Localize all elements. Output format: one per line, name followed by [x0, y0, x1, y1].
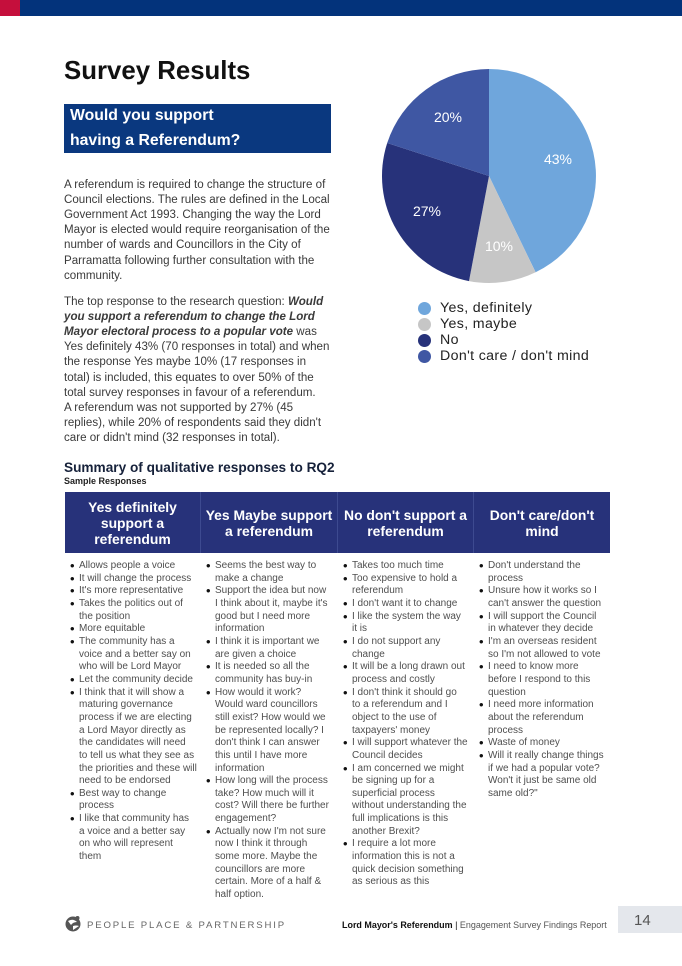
column: yes maybe responses: make a change: [215, 573, 283, 584]
findings paragraph: replies), while 20% of respondents said they didn't: [64, 417, 321, 429]
column: yes definitely responses: •: [70, 558, 75, 573]
red corner block: [0, 0, 20, 16]
column: yes maybe responses: engagement?: [215, 813, 276, 824]
column: don't care responses: •: [479, 697, 484, 712]
header: no: referendum: [367, 522, 444, 538]
column: no responses: as serious as this: [352, 876, 429, 887]
column: yes maybe responses: Would ward councillors: [215, 699, 318, 710]
column: don't care responses: Will it really change things: [488, 750, 604, 761]
column: no responses: [343, 558, 468, 887]
column: yes definitely responses: a voice and a better say: [79, 826, 185, 837]
column: don't care responses: Waste of money: [488, 737, 560, 748]
table heading: Summary of qualitative responses to RQ2: [64, 460, 335, 475]
column: no responses: •: [343, 571, 348, 586]
column: yes definitely responses: process: [79, 800, 114, 811]
page number: [618, 906, 682, 933]
column: don't care responses: process: [488, 573, 523, 584]
column: no responses: it is: [352, 623, 367, 634]
column: no responses: •: [343, 836, 348, 851]
column: no responses: I require a lot more: [352, 838, 436, 849]
column: yes definitely responses: process if we are electing: [79, 712, 192, 723]
column: yes maybe responses: half option.: [215, 889, 264, 900]
intro paragraph: [64, 178, 330, 282]
slice: yes definitely 43%: [489, 69, 596, 272]
column: yes definitely responses: I think that it will show a: [79, 687, 184, 698]
column: yes maybe responses: community has buy-in: [215, 674, 312, 685]
legend: [418, 300, 589, 364]
column: yes maybe responses: How would it work?: [215, 687, 301, 698]
column: no responses: full implications is this: [352, 813, 448, 824]
column: no responses: referendum: [352, 585, 403, 596]
column: yes definitely responses: More equitable: [79, 623, 145, 634]
findings paragraph: A referendum was not supported by 27% (45: [64, 402, 293, 414]
column: yes definitely responses: maturing governance: [79, 699, 173, 710]
header: yes definitely: [65, 492, 200, 553]
column: don't care responses: Won't it just be same old: [488, 775, 596, 786]
column: don't care responses: •: [479, 735, 484, 750]
column: don't care responses: question: [488, 687, 526, 698]
column: no responses: Takes too much time: [352, 560, 444, 571]
column: yes definitely responses: the position: [79, 611, 130, 622]
column: don't care responses: I will support the Council: [488, 611, 596, 622]
column: yes maybe responses: Seems the best way to: [215, 560, 316, 571]
column: yes maybe responses: information: [215, 623, 264, 634]
column: no responses: process and costly: [352, 674, 435, 685]
column: yes definitely responses: The community has a: [79, 636, 175, 647]
column: yes definitely responses: who will be Lord Mayor: [79, 661, 181, 672]
column: no responses: object to the use of: [352, 712, 437, 723]
column: yes maybe responses: don't think I can answer: [215, 737, 320, 748]
column: no responses: Too expensive to hold a: [352, 573, 457, 584]
column: yes definitely responses: to tell us what they see as: [79, 750, 194, 761]
column: yes definitely responses: the priorities and these will: [79, 762, 197, 774]
column: don't care responses: in whatever they decide: [488, 623, 593, 634]
column: yes maybe responses: some more. Maybe the: [215, 851, 317, 862]
intro paragraph: Council elections. The rules are defined in the Local: [64, 194, 330, 206]
intro paragraph: Mayor is elected would require reorganisation of the: [64, 224, 330, 236]
column: no responses: •: [343, 634, 348, 649]
column: don't care responses: Don't understand the: [488, 560, 581, 571]
column: no responses: Council decides: [352, 750, 423, 761]
column: yes maybe responses: Support the idea but now: [215, 585, 326, 596]
footer organisation name: PEOPLE PLACE & PARTNERSHIP: [87, 920, 286, 931]
pie chart: [382, 69, 596, 283]
column: yes definitely responses: them: [79, 851, 101, 862]
column: yes definitely responses: •: [70, 685, 75, 700]
column: yes maybe responses: •: [206, 773, 211, 788]
pie value labels: [413, 109, 572, 254]
column: yes maybe responses: •: [206, 634, 211, 649]
icon: people place partnership logo: [66, 916, 80, 932]
column: yes maybe responses: Actually now I'm not sure: [215, 826, 326, 837]
header: yes definitely: support a: [101, 514, 164, 530]
table subheading: Sample Responses: [64, 476, 147, 486]
column: yes definitely responses: •: [70, 786, 75, 801]
column: yes maybe responses: •: [206, 824, 211, 839]
column: yes maybe responses: information: [215, 762, 264, 774]
column: no responses: superficial process: [352, 788, 435, 799]
column: no responses: information this is not a: [352, 851, 455, 862]
question banner: having a Referendum?: [70, 132, 240, 148]
question banner: Would you support: [70, 107, 214, 124]
header: no: [338, 492, 473, 553]
column: don't care responses: I'm an overseas resident: [488, 636, 597, 647]
column: yes maybe responses: be represented locally? I: [215, 725, 324, 736]
column: yes definitely responses: It will change the process: [79, 573, 191, 584]
column: yes definitely responses: Allows people a voice: [79, 560, 175, 571]
column: yes maybe responses: take? How much will it: [215, 788, 314, 799]
column: don't care responses: •: [479, 558, 484, 573]
column: no responses: I am concerned we might: [352, 762, 464, 774]
question banner: [64, 104, 331, 153]
column: don't care responses: •: [479, 583, 484, 598]
column: yes maybe responses: are given a choice: [215, 649, 296, 660]
column: no responses: I will support whatever the: [352, 737, 468, 748]
column: yes definitely responses: •: [70, 634, 75, 649]
column: no responses: •: [343, 558, 348, 573]
column: don't care responses: I need to know more: [488, 661, 579, 672]
column: yes definitely responses: [70, 558, 197, 862]
column: yes maybe responses: this until I have more: [215, 750, 307, 761]
pie value labels: 27%: [413, 203, 441, 219]
pie value labels: 20%: [434, 109, 462, 125]
column: no responses: •: [343, 685, 348, 700]
column: no responses: •: [343, 735, 348, 750]
footer report title: Lord Mayor's Referendum | Engagement Survey Findings Report: [342, 920, 607, 930]
findings paragraph: the response Yes maybe 10% (17 responses in: [64, 356, 306, 368]
column: no responses: quick decision something: [352, 864, 464, 875]
column: no responses: without understanding the: [352, 800, 467, 811]
column: yes maybe responses: It is needed so all the: [215, 661, 310, 672]
intro paragraph: community.: [64, 270, 122, 282]
page number: 14: [634, 912, 651, 929]
findings paragraph: [64, 296, 329, 444]
column: yes definitely responses: •: [70, 583, 75, 598]
header: yes definitely: Yes definitely: [88, 498, 177, 514]
legend labels: [440, 300, 589, 364]
pie value labels: 43%: [544, 151, 572, 167]
intro paragraph: number of wards and Councillors in the City of: [64, 239, 301, 251]
column: yes maybe responses: •: [206, 659, 211, 674]
column: yes maybe responses: still exist? How would we: [215, 712, 326, 723]
findings paragraph: total) is included, this equates to over 50% of the: [64, 372, 314, 384]
column: yes maybe responses: I think it is important we: [215, 636, 319, 647]
header: yes definitely: referendum: [94, 530, 171, 546]
slice: no 27%: [382, 143, 489, 281]
pie value labels: 10%: [485, 238, 513, 254]
column: don't care responses: •: [479, 748, 484, 763]
column: no responses: to a referendum and I: [352, 699, 448, 710]
column: no responses: taxpayers' money: [352, 725, 430, 736]
column: yes maybe responses: now I think it through: [215, 838, 307, 849]
column: yes definitely responses: on who will represent: [79, 838, 173, 849]
findings paragraph: The top response to the research question: Would: [64, 296, 323, 308]
column: yes maybe responses: •: [206, 685, 211, 700]
column: don't care responses: same old?": [488, 788, 538, 799]
column: don't care responses: if we had a popular vote?: [488, 762, 600, 774]
column: don't care responses: before I respond to this: [488, 674, 590, 685]
column: no responses: •: [343, 609, 348, 624]
column: yes definitely responses: •: [70, 596, 75, 611]
column: no responses: •: [343, 760, 348, 776]
top banner: [0, 0, 682, 16]
column: don't care responses: •: [479, 659, 484, 674]
column: no responses: change: [352, 649, 385, 660]
column: don't care responses: about the referendum: [488, 712, 584, 723]
legend labels: No: [440, 332, 459, 348]
column: yes maybe responses: I think about it, maybe it's: [215, 598, 328, 609]
column: no responses: another Brexit?: [352, 826, 420, 837]
column: yes definitely responses: Best way to change: [79, 788, 166, 799]
column: don't care responses: Unsure how it works so I: [488, 585, 597, 596]
header: yes maybe: Yes Maybe support: [206, 506, 332, 522]
column: no responses: I like the system the way: [352, 611, 461, 622]
column: yes definitely responses: •: [70, 672, 75, 687]
column: don't care responses: so I'm not allowed to vote: [488, 649, 601, 660]
header: no: No don't support a: [344, 506, 467, 522]
column: yes maybe responses: councillors are more: [215, 864, 305, 875]
column: yes definitely responses: need to be endorsed: [79, 775, 171, 786]
legend dots: [418, 302, 431, 363]
column: no responses: •: [343, 659, 348, 674]
column: yes maybe responses: •: [206, 583, 211, 598]
column: no responses: I don't want it to change: [352, 598, 457, 609]
column: no responses: be signing up for a: [352, 775, 434, 786]
findings paragraph: care or didn't mind (32 responses in total).: [64, 432, 280, 444]
header: don't care: [474, 492, 610, 553]
intro paragraph: Government Act 1993. Changing the way the Lord: [64, 209, 321, 221]
column: yes maybe responses: •: [206, 558, 211, 573]
column: no responses: It will be a long drawn out: [352, 661, 465, 672]
slice: don't care 20%: [387, 69, 489, 176]
column: yes definitely responses: voice and a better say on: [79, 649, 191, 660]
column: yes definitely responses: It's more representative: [79, 585, 183, 596]
legend labels: Yes, definitely: [440, 300, 532, 316]
header: don't care: Don't care/don't: [490, 506, 594, 522]
header: yes maybe: a referendum: [225, 522, 313, 538]
header: yes maybe: [201, 492, 337, 553]
column: yes definitely responses: •: [70, 621, 75, 636]
column: don't care responses: •: [479, 634, 484, 649]
title: Survey Results: [64, 57, 250, 85]
findings paragraph: you support a referendum to change the Lord: [64, 311, 315, 323]
column: yes definitely responses: a Lord Mayor directly as: [79, 725, 186, 736]
column: don't care responses: process: [488, 725, 523, 736]
column: don't care responses: •: [479, 609, 484, 624]
legend labels: Yes, maybe: [440, 316, 517, 332]
column: yes maybe responses: How long will the process: [215, 775, 328, 786]
column: yes definitely responses: Let the community decide: [79, 674, 193, 685]
column: yes maybe responses: good but I need more: [215, 611, 310, 622]
column: don't care responses: can't answer the question: [488, 598, 601, 609]
column: no responses: I do not support any: [352, 636, 440, 647]
column: don't care responses: I need more information: [488, 699, 594, 710]
findings paragraph: total survey responses in favour of a referendum.: [64, 387, 316, 399]
column: yes maybe responses: cost? Will there be further: [215, 800, 329, 811]
findings paragraph: Yes definitely 43% (70 responses in total) and when: [64, 341, 329, 353]
column: no responses: I don't think it should go: [352, 687, 457, 698]
column: don't care responses: [479, 558, 604, 799]
column: yes maybe responses: certain. More of a half &: [215, 876, 321, 887]
column: yes definitely responses: •: [70, 571, 75, 586]
table header: [65, 492, 610, 553]
header: don't care: mind: [525, 522, 559, 538]
slice: yes maybe 10%: [469, 176, 536, 283]
column: yes definitely responses: Takes the politics out of: [79, 598, 183, 609]
column: no responses: •: [343, 596, 348, 611]
intro paragraph: A referendum is required to change the structure of: [64, 178, 325, 190]
column: yes definitely responses: •: [70, 811, 75, 826]
legend labels: Don't care / don't mind: [440, 348, 589, 364]
findings paragraph: Mayor electoral process to a popular vote was: [64, 326, 317, 338]
intro paragraph: Parramatta following further consultation with the: [64, 255, 314, 267]
column: yes maybe responses: [206, 558, 329, 900]
column: yes definitely responses: I like that community has: [79, 813, 189, 824]
column: yes definitely responses: the candidates will need: [79, 737, 186, 748]
